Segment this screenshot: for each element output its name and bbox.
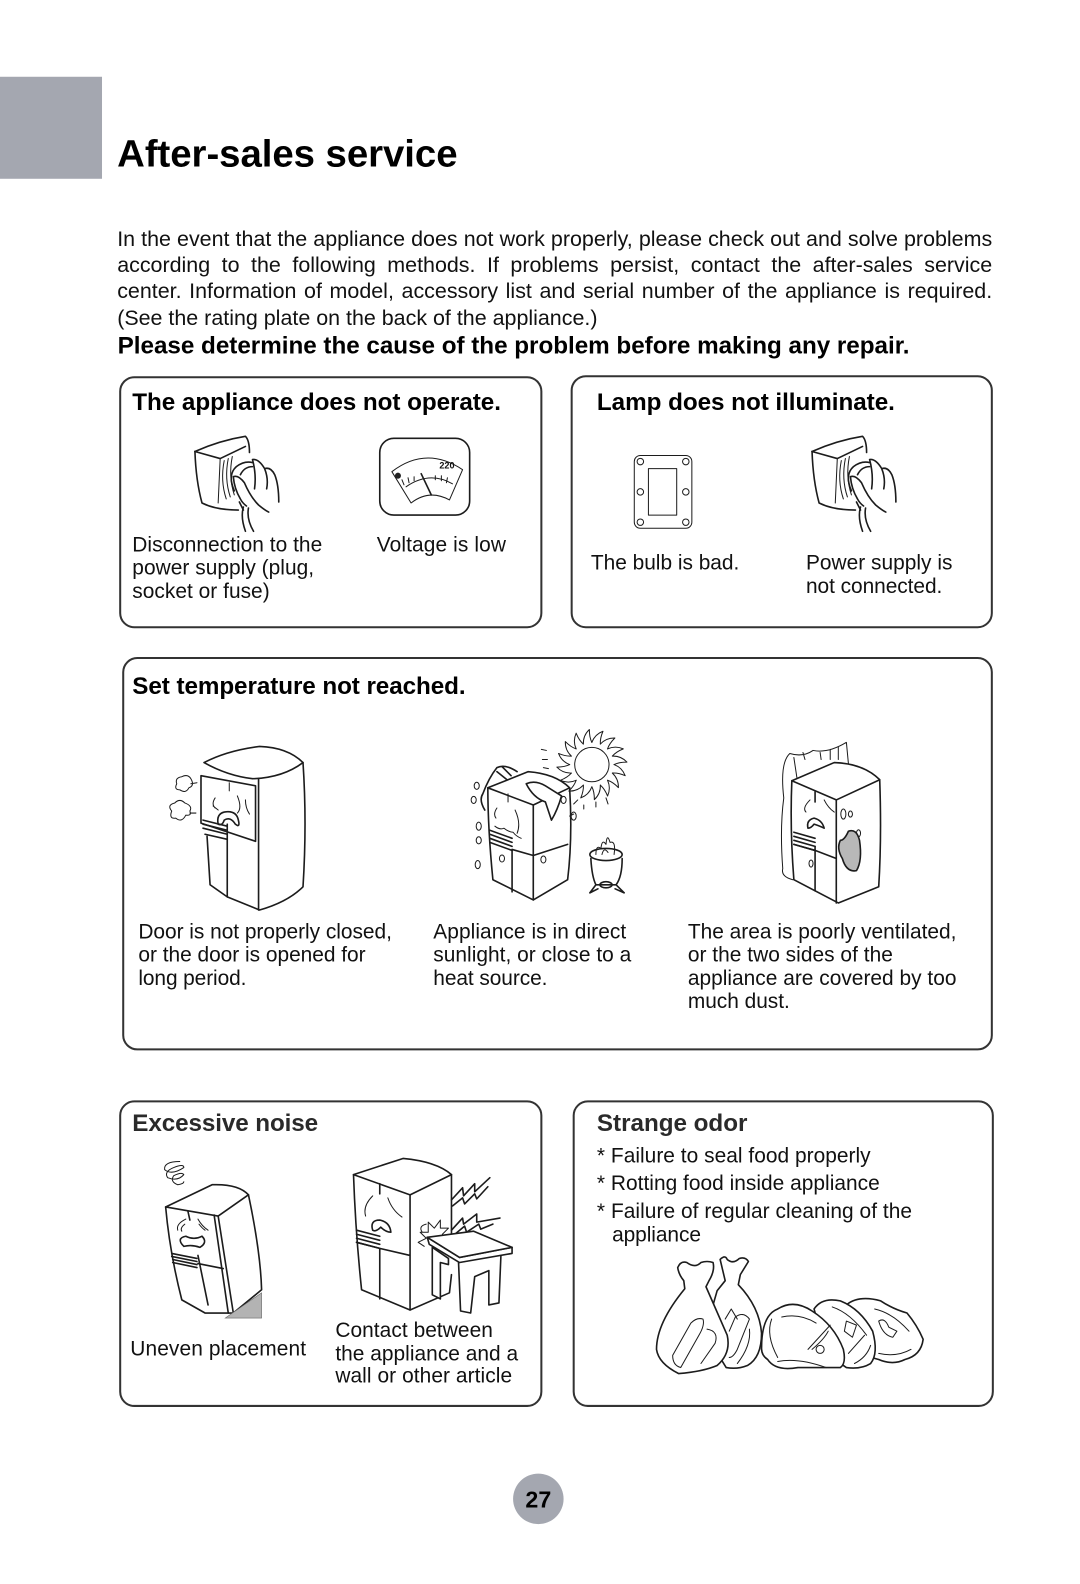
text: door	[138, 920, 392, 990]
text: door: or the door is opened for	[138, 944, 366, 967]
intro paragraph: In the event that the appliance does not work properly, please check out and solve problems	[117, 227, 992, 251]
icon: sun	[557, 730, 627, 800]
bold instruction: Please determine the cause of the problem before making any repair.	[118, 333, 910, 360]
text: ventilation: or the two sides of the	[688, 944, 893, 967]
text: contact: Contact between	[335, 1319, 493, 1342]
icon: heat source	[590, 838, 624, 893]
panel: set temperature not reached	[123, 658, 992, 1049]
text: ventilation: The area is poorly ventilated,	[688, 920, 956, 943]
text: disconnection: power supply (plug,	[132, 557, 314, 580]
text: uneven: Uneven placement	[130, 1337, 306, 1360]
panel: excessive noise	[120, 1101, 541, 1406]
text: door: long period.	[138, 967, 246, 990]
illustration: fridge in sunlight near heat	[471, 730, 627, 900]
list of odor causes	[597, 1145, 912, 1246]
text: power not connected: not connected.	[806, 575, 942, 598]
title: After-sales service	[117, 133, 458, 176]
dust stain	[839, 831, 861, 871]
text: contact: wall or other article	[334, 1365, 512, 1388]
header tab	[0, 77, 102, 179]
food bags	[657, 1257, 762, 1374]
panel: strange odor	[574, 1101, 993, 1406]
text: sunlight: sunlight, or close to a	[433, 944, 632, 967]
text: ventilation	[688, 920, 956, 1013]
intro paragraph: center. Information of model, accessory list and serial number of the appliance is required.	[117, 279, 992, 303]
icon: lamp cover	[634, 456, 692, 528]
text: contact	[334, 1319, 519, 1388]
heading: noise: Excessive noise	[132, 1110, 318, 1137]
list of odor causes: * Failure of regular cleaning of the	[597, 1200, 912, 1223]
text: disconnection: Disconnection to the	[132, 533, 322, 556]
text: disconnection	[132, 533, 322, 603]
meat pieces	[762, 1299, 923, 1369]
heading: does not operate: The appliance does not operate.	[132, 389, 501, 416]
table	[432, 1247, 448, 1299]
text: voltage is low: Voltage is low	[377, 533, 507, 556]
text: bulb is bad: The bulb is bad.	[591, 552, 739, 575]
wedge under fridge	[225, 1293, 262, 1318]
text: ventilation: appliance are covered by too	[688, 967, 956, 990]
heading: temperature: Set temperature not reached.	[132, 673, 466, 700]
icon: voltage meter	[380, 438, 470, 515]
illustration: door open fridge	[170, 746, 305, 910]
icon: plug not connected	[812, 436, 896, 531]
page number badge	[513, 1474, 564, 1524]
text: power not connected	[806, 552, 952, 598]
panel: the appliance does not operate	[120, 377, 541, 627]
list of odor causes: * Failure to seal food properly	[597, 1145, 871, 1168]
heading: odor: Strange odor	[597, 1110, 748, 1137]
intro paragraph	[117, 227, 992, 330]
illustration: rotting food	[657, 1257, 923, 1374]
icon: voltage meter: 220	[439, 461, 455, 471]
text: ventilation: much dust.	[688, 990, 790, 1013]
text: sunlight	[433, 920, 632, 990]
panel: lamp does not illuminate	[572, 376, 992, 627]
text: door: Door is not properly closed,	[138, 920, 392, 943]
illustration: tilted fridge	[165, 1162, 262, 1318]
illustration: poorly ventilated fridge	[781, 742, 881, 903]
page number badge: 27	[525, 1486, 551, 1512]
icon: hand unplugging	[195, 436, 279, 531]
intro paragraph: (See the rating plate on the back of the appliance.)	[117, 306, 597, 330]
text: power not connected: Power supply is	[806, 552, 952, 575]
text: sunlight: heat source.	[433, 967, 547, 990]
intro paragraph: according to the following methods. If problems persist, contact the after-sales service	[117, 253, 992, 277]
list of odor causes: appliance	[612, 1223, 701, 1246]
heading: lamp: Lamp does not illuminate.	[597, 389, 895, 416]
text: sunlight: Appliance is in direct	[433, 920, 626, 943]
text: contact: the appliance and a	[335, 1342, 519, 1365]
illustration: fridge hitting table	[354, 1158, 512, 1313]
text: disconnection: socket or fuse)	[132, 580, 270, 603]
list of odor causes: * Rotting food inside appliance	[597, 1172, 880, 1195]
